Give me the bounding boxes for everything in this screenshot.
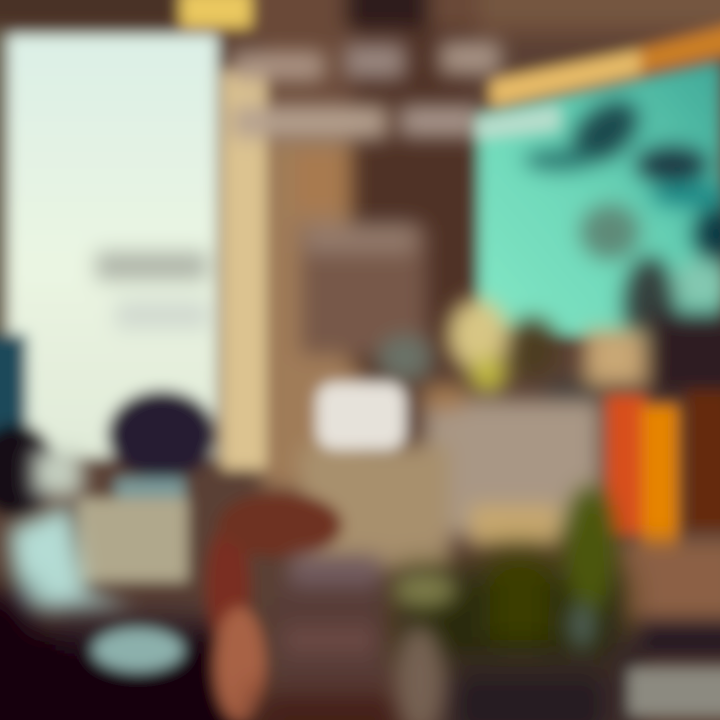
lower desk tone — [300, 445, 560, 570]
window caption smudge — [96, 252, 210, 330]
dark right strip — [612, 625, 720, 720]
mauve device — [275, 555, 385, 705]
shelf and dark objects, right — [542, 315, 720, 413]
plant pot — [445, 665, 615, 720]
dark foreground — [0, 590, 250, 720]
red hand — [206, 493, 342, 720]
green plant leaf — [393, 486, 616, 614]
plant tops and pots — [377, 299, 600, 535]
pale sage strip under window — [32, 450, 82, 496]
grey tray — [628, 668, 720, 716]
beam — [221, 70, 267, 470]
white cup — [316, 382, 406, 450]
panel dark shapes — [524, 89, 720, 353]
ceiling band — [0, 0, 720, 38]
window left frame — [0, 30, 3, 340]
beige paper stack — [78, 498, 188, 582]
ceiling lamp — [180, 0, 252, 28]
dark mug — [108, 391, 216, 502]
colored books: orange stripes — [606, 390, 720, 555]
left dark navy object — [0, 335, 55, 516]
lower brown foreground — [255, 695, 405, 720]
pale teal sheet — [10, 505, 135, 610]
pale teal cup — [92, 628, 184, 672]
pot highlight — [568, 601, 596, 649]
green plant — [400, 550, 625, 665]
orange banner strip — [475, 22, 720, 140]
window — [7, 34, 218, 458]
wooden wall — [262, 30, 475, 490]
right lower wall — [620, 540, 720, 620]
tan bottle — [396, 625, 444, 720]
teal panel — [478, 62, 720, 345]
heading placeholder: blurred title lines — [232, 42, 500, 138]
